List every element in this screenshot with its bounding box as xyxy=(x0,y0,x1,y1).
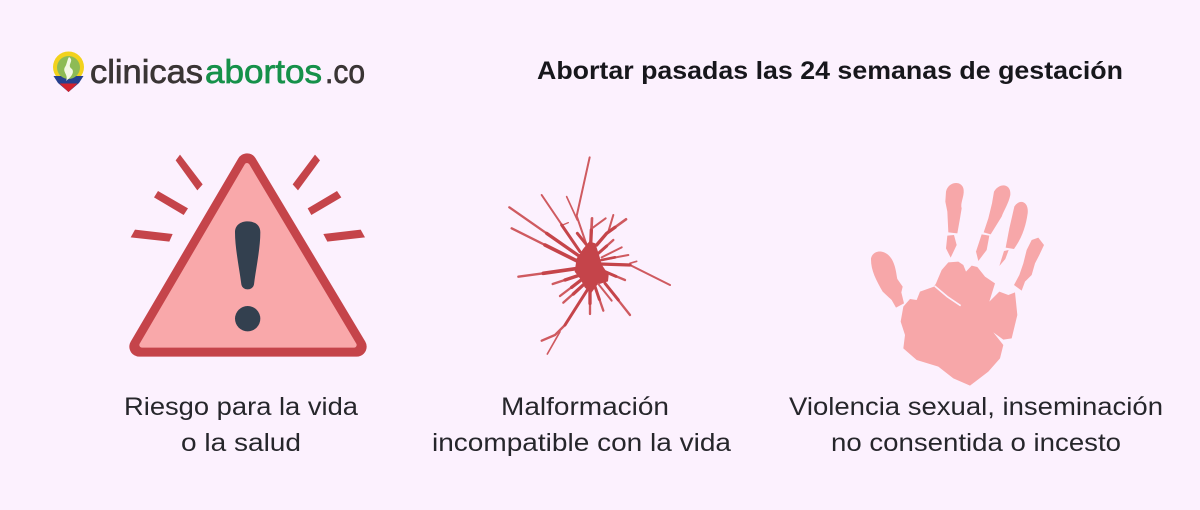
title: Abortar pasadas las 24 semanas de gestación xyxy=(537,57,1123,85)
caption: riesgo: o la salud xyxy=(181,429,301,457)
little finger xyxy=(1014,238,1044,291)
ring finger xyxy=(1006,202,1028,249)
caption: violencia xyxy=(789,393,1163,457)
icon: crack xyxy=(509,157,670,354)
caption: violencia: no consentida o incesto xyxy=(831,429,1121,457)
logo text: clinicas: clinicas xyxy=(90,53,203,90)
exclamation mark xyxy=(235,221,260,331)
triangle xyxy=(139,163,357,347)
crack centre xyxy=(575,241,609,293)
crack lines, outer thin parts xyxy=(509,157,670,354)
index finger xyxy=(945,183,964,233)
warning rays xyxy=(131,155,365,242)
caption: riesgo: Riesgo para la vida xyxy=(124,393,358,421)
logo xyxy=(53,52,365,92)
thumb xyxy=(871,251,904,308)
caption: malformación: Malformación xyxy=(501,393,669,421)
caption: violencia: Violencia sexual, inseminación xyxy=(789,393,1163,421)
caption: malformación xyxy=(432,393,731,457)
logo text: .co: .co xyxy=(325,53,365,90)
middle finger xyxy=(984,185,1010,234)
caption: malformación: incompatible con la vida xyxy=(432,429,731,457)
palm xyxy=(901,262,1017,386)
caption: riesgo xyxy=(124,393,358,457)
icon: map pin xyxy=(53,52,84,92)
logo text: abortos: abortos xyxy=(205,53,322,90)
icon: hand print xyxy=(871,183,1044,386)
icon: warning triangle xyxy=(131,155,365,347)
crack lines, thick roots xyxy=(543,225,630,325)
palm crease xyxy=(935,286,961,306)
